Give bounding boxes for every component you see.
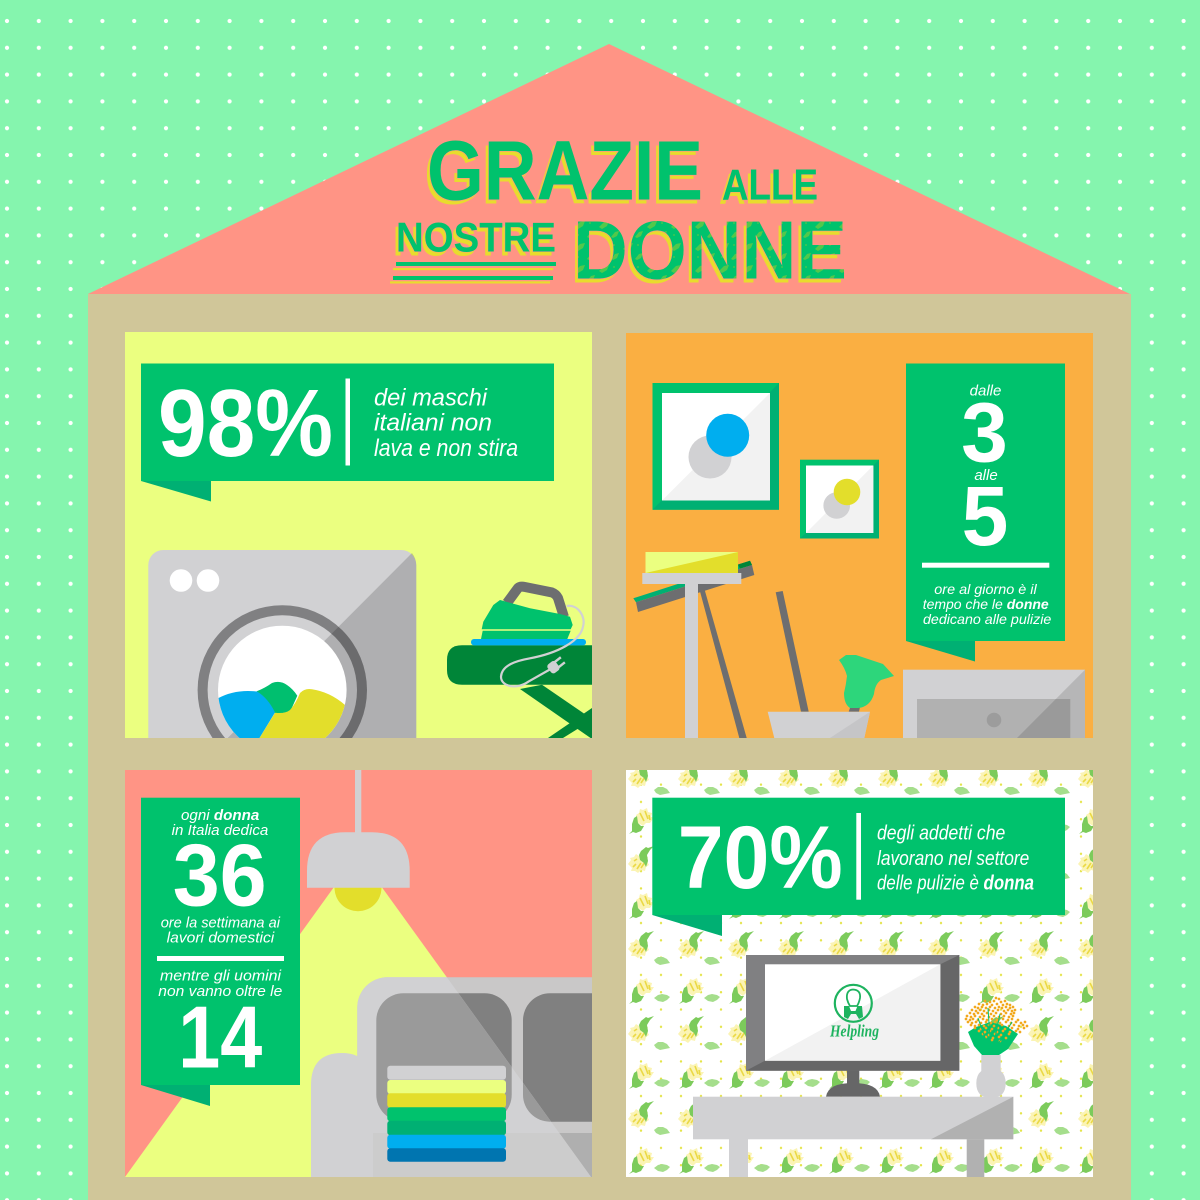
title: GRAZIE <box>427 123 703 217</box>
title: DONNE <box>573 203 847 296</box>
vase with mimosa <box>966 998 1027 1098</box>
panel: laundry room <box>125 332 592 738</box>
panel: living room <box>125 770 592 1177</box>
banner: 70%: 70% <box>678 807 843 907</box>
washing machine <box>148 550 416 738</box>
lamp light cone <box>125 888 447 1177</box>
stack of folded clothes <box>387 1066 506 1162</box>
banner: 36 and 14 hours <box>141 798 300 1106</box>
house roof <box>88 44 1130 294</box>
banner: 70%: degli addetti che <box>877 822 1005 844</box>
helpling logo: Helpling <box>829 1022 879 1040</box>
banner: 36 and 14 hours: non vanno oltre le <box>158 983 282 1000</box>
title <box>390 123 847 300</box>
table <box>693 1097 1013 1179</box>
title: NOSTRE <box>396 214 556 261</box>
ironing board <box>447 639 592 739</box>
banner: 36 and 14 hours: 36 <box>173 826 267 925</box>
iron <box>481 587 573 639</box>
banner: 3 to 5 hours <box>906 364 1065 662</box>
broom and mop <box>633 561 809 738</box>
title: ALLE <box>719 164 815 213</box>
banner: 3 to 5 hours: ore al giorno è il <box>934 581 1038 597</box>
banner: 36 and 14 hours: ogni donna <box>181 807 259 824</box>
cabinet <box>903 670 1085 740</box>
ceiling lamp <box>307 770 410 911</box>
banner: 3 to 5 hours: dalle <box>970 383 1001 400</box>
banner: 3 to 5 hours: tempo che le donne <box>923 596 1049 612</box>
banner: 36 and 14 hours: lavori domestici <box>167 930 275 947</box>
banner: 70%: lavorano nel settore <box>877 848 1029 870</box>
panel: wallpapered room <box>626 770 1093 1179</box>
wallpaper pattern <box>626 770 1093 1177</box>
title: NOSTRE <box>393 218 553 265</box>
banner: 36 and 14 hours: ore la settimana ai <box>161 915 281 932</box>
house wall <box>88 294 1131 1200</box>
banner: 3 to 5 hours: 3 <box>961 386 1008 480</box>
sofa <box>311 977 592 1177</box>
potted plant <box>768 655 894 738</box>
banner: 98%: lava e non stira <box>374 435 518 462</box>
banner: 36 and 14 hours: mentre gli uomini <box>160 968 282 985</box>
banner: 3 to 5 hours: alle <box>974 467 998 484</box>
large picture frame <box>652 383 779 510</box>
title: ALLE <box>722 160 818 209</box>
title: GRAZIE <box>424 127 700 221</box>
panel: cleaning closet <box>626 333 1093 740</box>
banner: 98%: dei maschi <box>374 385 488 412</box>
shelf with pole and sponge <box>642 552 741 738</box>
banner: 98% <box>141 364 554 502</box>
banner: 98%: italiani non <box>374 410 492 437</box>
banner: 70%: delle pulizie è donna <box>877 872 1034 894</box>
banner: 36 and 14 hours: in Italia dedica <box>172 822 268 839</box>
iron cord and plug <box>501 606 584 686</box>
helpling logo <box>829 985 879 1040</box>
small picture frame <box>800 460 879 538</box>
title: DONNE <box>570 207 844 300</box>
banner: 3 to 5 hours: 5 <box>962 469 1008 563</box>
banner: 3 to 5 hours: dedicano alle pulizie <box>923 611 1052 627</box>
banner: 36 and 14 hours: 14 <box>178 988 262 1087</box>
monitor <box>746 955 959 1097</box>
banner: 70% <box>652 798 1065 936</box>
banner: 98%: 98% <box>158 370 333 477</box>
